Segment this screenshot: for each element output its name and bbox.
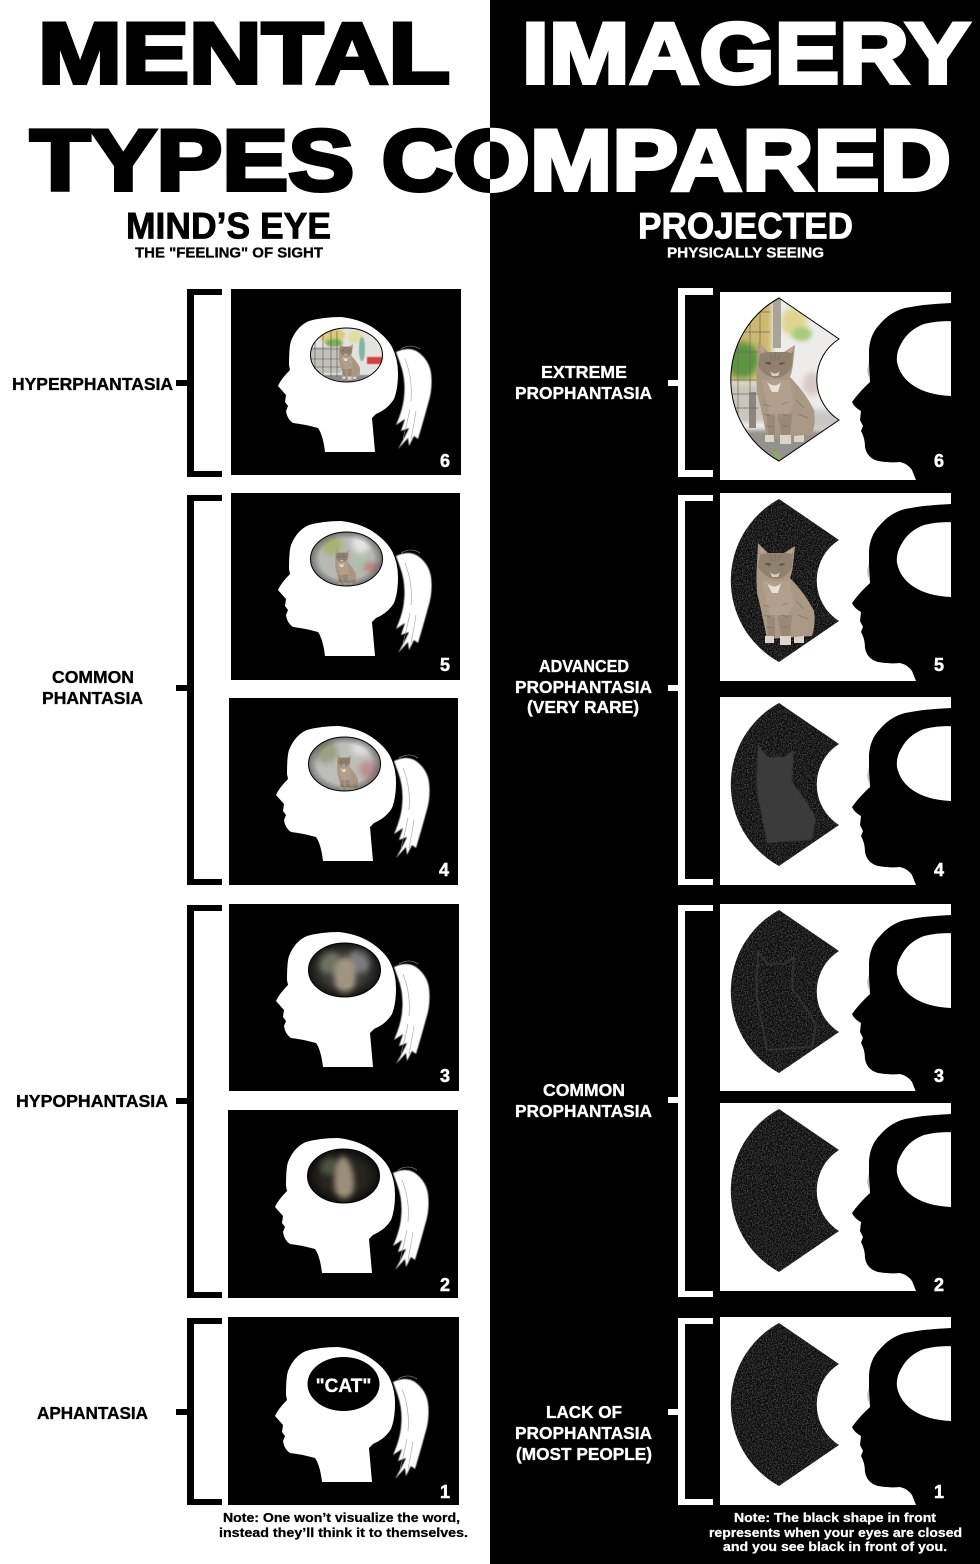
level number: 2 xyxy=(934,1275,944,1295)
label: Common Prophantasia: COMMON xyxy=(543,1080,625,1100)
note: projected: and you see black in front of you. xyxy=(723,1540,947,1554)
mental image: blurred cat xyxy=(309,738,380,790)
level number: 6 xyxy=(440,451,450,471)
thought bubble: CAT word xyxy=(308,1357,380,1411)
bracket: hyperphantasia xyxy=(176,289,222,477)
title xyxy=(30,6,970,209)
note: projected: Note: The black shape in front xyxy=(734,1511,937,1525)
note: projected xyxy=(709,1511,962,1554)
label: Aphantasia: APHANTASIA xyxy=(37,1403,148,1423)
label: Extreme Prophantasia: EXTREME xyxy=(541,362,627,382)
label: Common Prophantasia xyxy=(515,1080,652,1121)
label: Lack of Prophantasia: (MOST PEOPLE) xyxy=(516,1444,652,1464)
panel: projected level 4 xyxy=(720,697,951,885)
label: Hypophantasia: HYPOPHANTASIA xyxy=(16,1091,168,1111)
panel: projected level 6 xyxy=(720,292,951,480)
panel: mind's eye level 4 xyxy=(229,698,458,885)
bracket: common phantasia xyxy=(176,495,222,885)
label: Lack of Prophantasia: PROPHANTASIA xyxy=(515,1423,652,1443)
label: Advanced Prophantasia: (VERY RARE) xyxy=(527,697,639,717)
projected image: faint cat outline xyxy=(731,910,839,1073)
level number: 4 xyxy=(934,860,944,880)
level number: 3 xyxy=(934,1066,944,1086)
level number: 3 xyxy=(440,1066,450,1086)
panel: mind's eye level 1 xyxy=(228,1317,459,1505)
brackets: mind's eye xyxy=(176,289,222,1505)
bracket: lack of prophantasia xyxy=(668,1318,713,1505)
mental image: slightly blurred cat xyxy=(311,532,382,586)
thought bubble: CAT word: "CAT" xyxy=(316,1376,371,1397)
panel: mind's eye level 2 xyxy=(228,1110,458,1298)
label: Advanced Prophantasia xyxy=(515,656,652,717)
level number: 2 xyxy=(440,1275,450,1295)
title line: TYPES COMPARED: TYPES COMPARED xyxy=(30,113,951,209)
projected image: cat without background xyxy=(731,499,839,662)
label: Common Prophantasia: PROPHANTASIA xyxy=(515,1101,652,1121)
panel: mind's eye level 3 xyxy=(229,904,459,1091)
label: Common Phantasia xyxy=(42,667,143,708)
label: Extreme Prophantasia xyxy=(515,362,652,403)
category labels: projected xyxy=(515,362,652,1464)
title word: MENTAL: MENTAL xyxy=(38,6,450,102)
projected image: empty black shape xyxy=(731,1323,839,1486)
level number: 1 xyxy=(440,1482,450,1502)
label: Hyperphantasia: HYPERPHANTASIA xyxy=(12,374,173,394)
panel: mind's eye level 6 xyxy=(231,289,461,475)
panel: mind's eye level 5 xyxy=(231,493,460,680)
level number: 4 xyxy=(439,860,449,880)
note: mind's eye: Note: One won’t visualize the word, xyxy=(223,1511,460,1525)
level number: 6 xyxy=(934,451,944,471)
panel: projected level 2 xyxy=(720,1103,951,1295)
background: right black half xyxy=(490,0,980,1564)
label: Extreme Prophantasia: PROPHANTASIA xyxy=(515,383,652,403)
column heading: Mind's Eye: THE "FEELING" OF SIGHT xyxy=(135,246,323,262)
note: mind's eye xyxy=(219,1511,468,1540)
note: projected: represents when your eyes are closed xyxy=(709,1526,962,1540)
background: left white half xyxy=(0,0,490,1564)
title word: IMAGERY: IMAGERY xyxy=(522,6,970,102)
column heading: Mind's Eye: MIND’S EYE xyxy=(126,206,331,246)
bracket: common prophantasia xyxy=(668,905,713,1297)
mental image: very dim blurred shape xyxy=(308,1150,379,1202)
level number: 5 xyxy=(440,655,450,675)
category labels: mind's eye xyxy=(12,374,173,1423)
label: Advanced Prophantasia: PROPHANTASIA xyxy=(515,677,652,697)
bracket: advanced prophantasia xyxy=(668,495,713,885)
label: Common Phantasia: PHANTASIA xyxy=(42,688,143,708)
bracket: hypophantasia xyxy=(176,905,222,1298)
note: mind's eye: instead they’ll think it to themselves. xyxy=(219,1526,468,1540)
label: Lack of Prophantasia xyxy=(515,1402,652,1464)
bracket: aphantasia xyxy=(176,1318,222,1505)
label: Common Phantasia: COMMON xyxy=(52,667,134,687)
mental image: dim blurred shape xyxy=(309,944,380,996)
level number: 5 xyxy=(934,655,944,675)
brackets: projected xyxy=(668,288,713,1505)
projected image: grey cat silhouette xyxy=(731,703,839,866)
panel: projected level 5 xyxy=(720,493,951,681)
column heading: Projected: PROJECTED xyxy=(638,206,853,246)
bracket: extreme prophantasia xyxy=(668,288,713,477)
mental image: sharp cat xyxy=(311,328,382,382)
panel: projected level 3 xyxy=(720,904,951,1092)
column heading: Projected: PHYSICALLY SEEING xyxy=(667,246,824,262)
projected image: full colour cat xyxy=(730,297,840,462)
panel: projected level 1 xyxy=(720,1317,951,1505)
label: Advanced Prophantasia: ADVANCED xyxy=(539,656,629,676)
projected image: barely visible cat outline xyxy=(731,1109,839,1272)
level number: 1 xyxy=(934,1482,944,1502)
label: Lack of Prophantasia: LACK OF xyxy=(546,1402,622,1422)
